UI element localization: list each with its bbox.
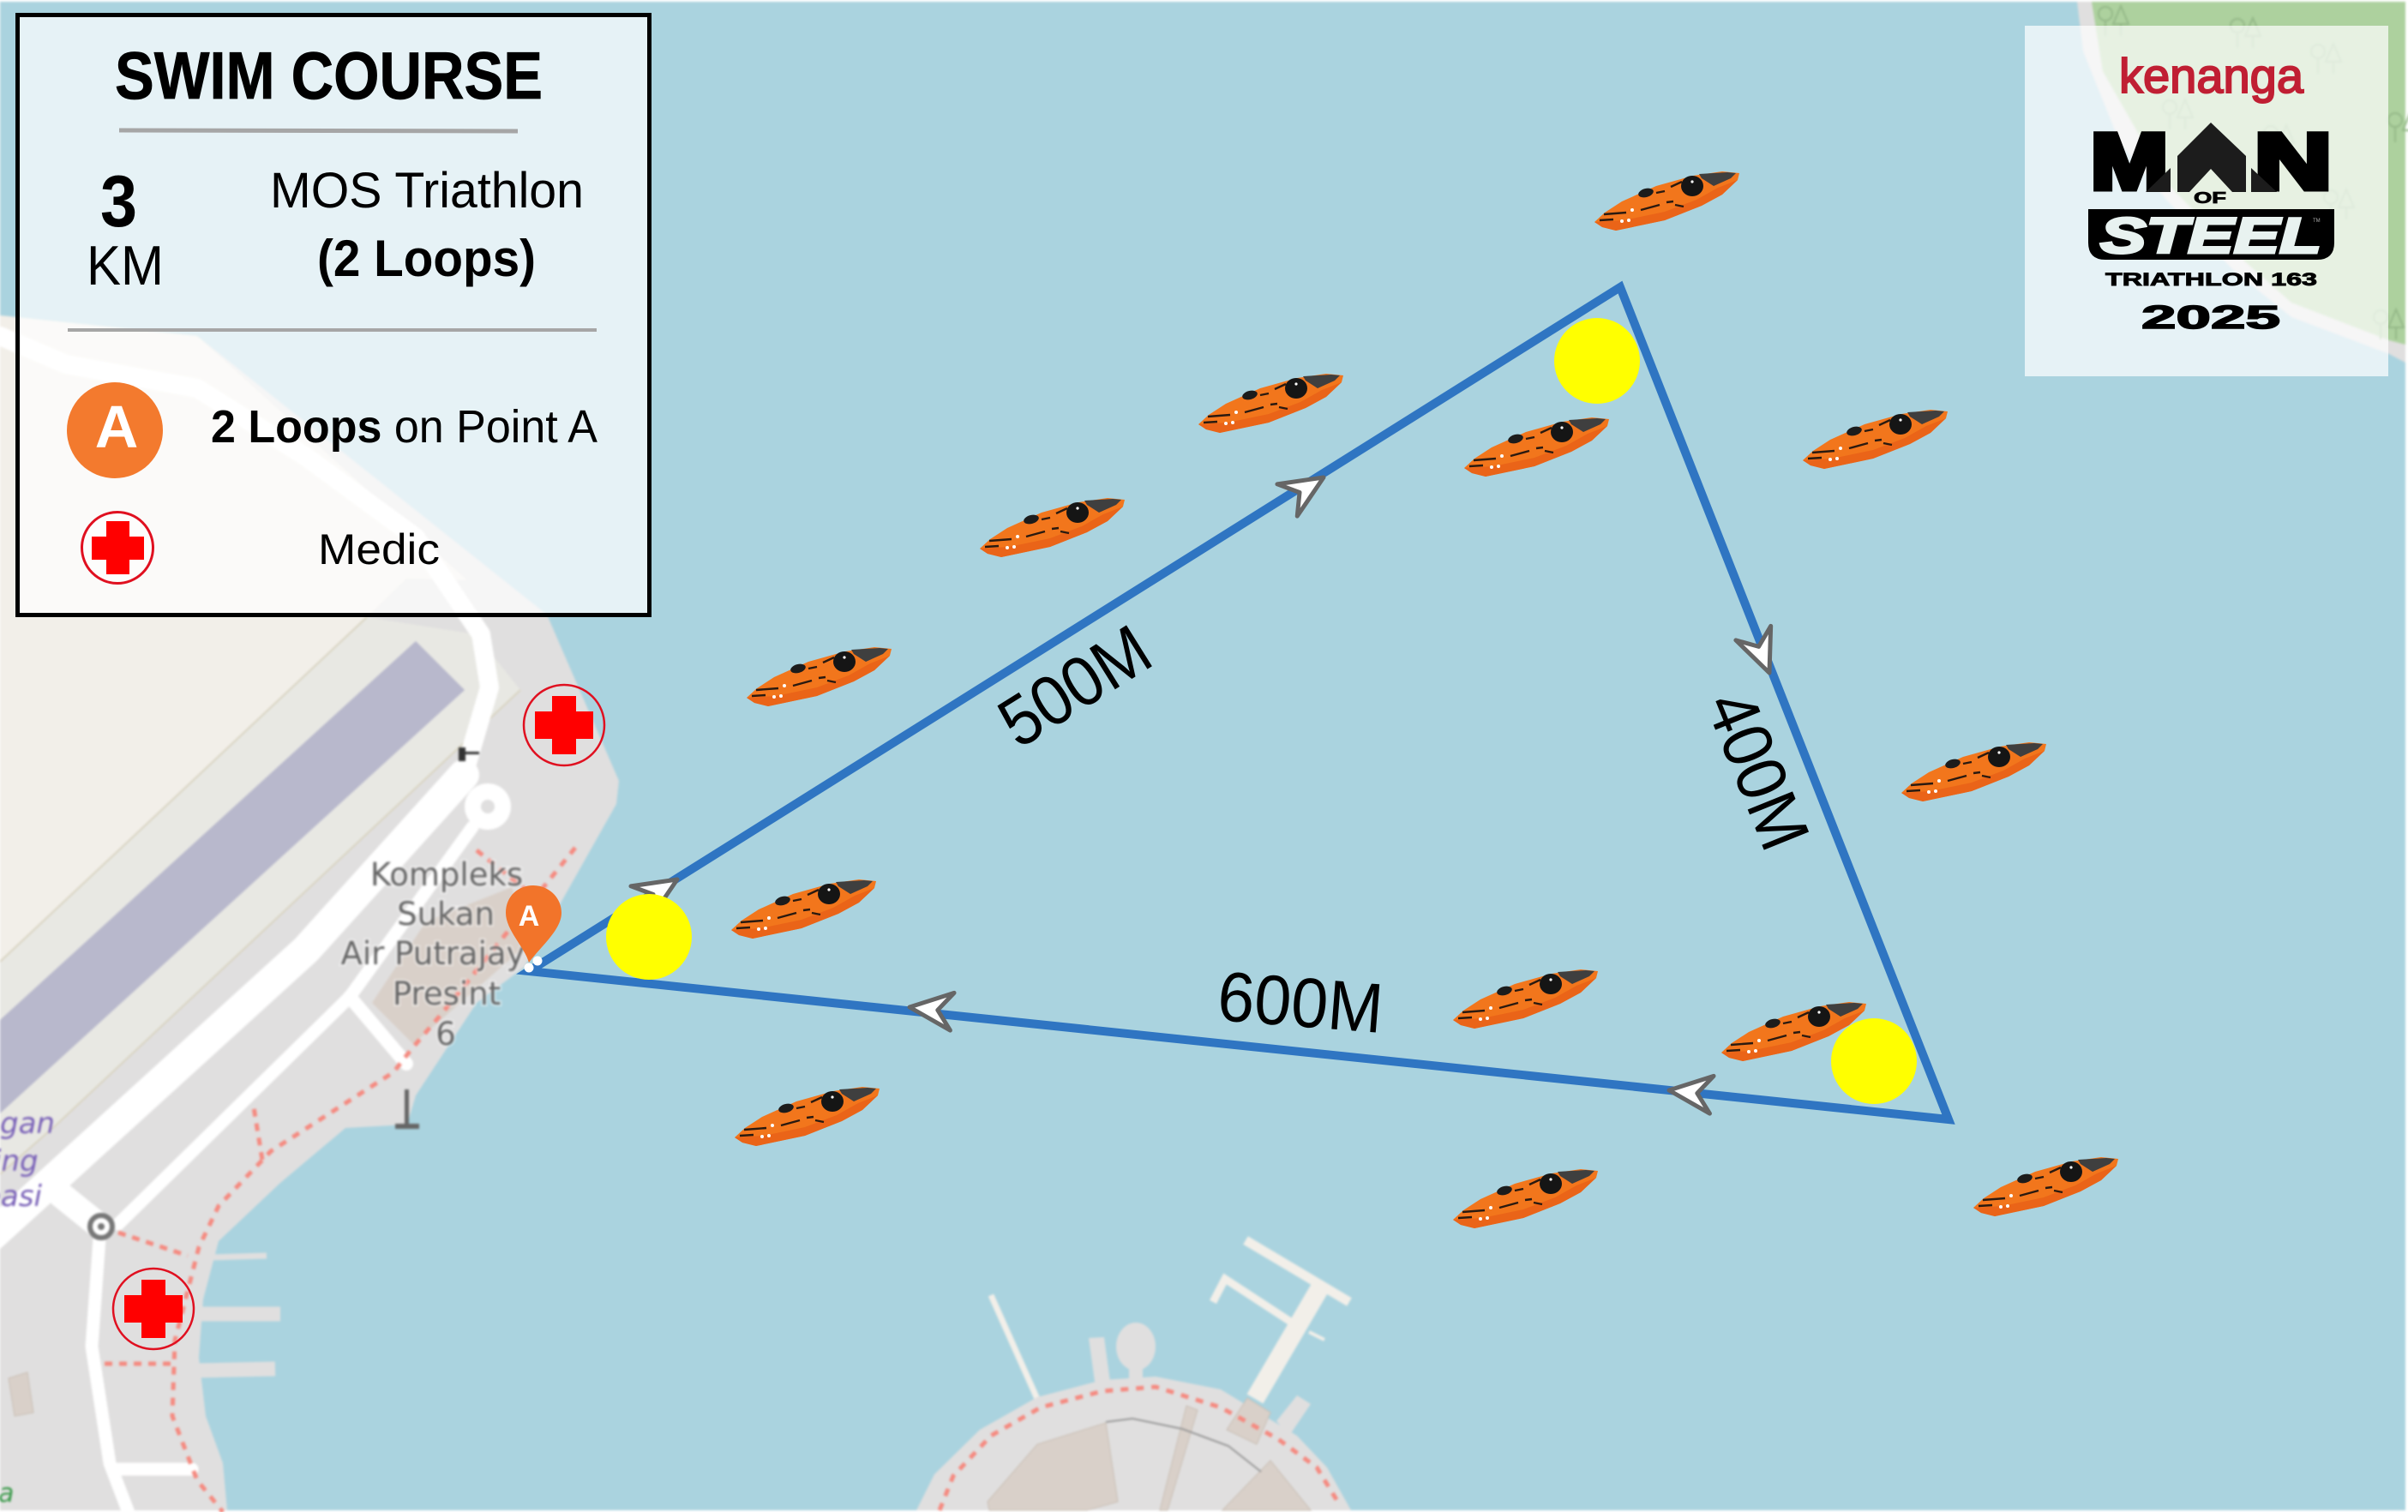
buoy: top corner (1554, 318, 1640, 404)
roundabout hole (481, 800, 495, 813)
race description (270, 163, 584, 287)
kayak (731, 879, 876, 939)
pedestrian paths (105, 848, 575, 1512)
distance label: 600M: 600M (1215, 957, 1386, 1048)
arrow: 400M leg (1736, 626, 1786, 680)
logo: MAN (2091, 118, 2332, 206)
kayak (1973, 1157, 2118, 1216)
kayak (980, 498, 1125, 557)
buoy: start (606, 894, 692, 980)
pier icon (395, 1089, 419, 1129)
icon: point A: A (95, 393, 138, 460)
map label: Kompleks Sukan Air Putrajaya Presint 6: Sukan (397, 896, 495, 933)
logo: 2025: 2025 (2141, 300, 2280, 336)
distance label: 400M: 400M (1690, 681, 1824, 861)
map label: Kompleks Sukan Air Putrajaya Presint 6: Air Putrajay (341, 935, 525, 972)
kayak (1901, 742, 2046, 801)
distance: 3 KM: 3 (100, 161, 137, 243)
logo: MAN: A (2195, 124, 2226, 172)
icon: medic legend (82, 513, 153, 583)
arrow: start of 500M leg (631, 863, 688, 918)
map label: Kompleks Sukan Air Putrajaya Presint 6: 6 (435, 1016, 456, 1053)
icon: mountain (2146, 123, 2277, 192)
island, bottom centre (916, 1240, 1351, 1510)
map label: purple place name (0, 1107, 55, 1214)
distance label: 500M: 500M (985, 610, 1165, 763)
logo: kenanga: kenanga (2119, 49, 2303, 104)
logo: STEEL badge: STEEL (2100, 208, 2321, 264)
logo: triathlon 163: TRIATHLON 163 (2105, 270, 2317, 290)
swim course triangle (529, 287, 1949, 1119)
kayak (1721, 1002, 1866, 1061)
panel: event logo (2025, 26, 2388, 376)
kayak (1594, 171, 1739, 231)
map label: purple place name: gan (0, 1107, 55, 1141)
icon: start pin A: A (519, 900, 539, 933)
legend text: medic: Medic (318, 525, 440, 573)
arrow: 600M leg near corner (1667, 1071, 1714, 1113)
kayak (1198, 374, 1343, 433)
icon: start pin A (506, 885, 561, 972)
roundabout marker (90, 1215, 112, 1238)
arrow: 500M leg (1277, 461, 1334, 516)
small tan hut (9, 1372, 33, 1416)
icon: medic, north (524, 685, 604, 765)
kayak (1464, 417, 1609, 477)
heading: SWIM COURSE (115, 38, 543, 113)
kayak (735, 1087, 880, 1146)
land: sports ground band (0, 617, 520, 1174)
logo: MAN: N (2255, 118, 2332, 206)
map label: Kompleks Sukan Air Putrajaya Presint 6: Kompleks (370, 856, 523, 893)
land: light area (0, 315, 467, 962)
piers, left shore (195, 1256, 280, 1371)
race description: (2 Loops) (317, 230, 536, 287)
kayak (1453, 969, 1598, 1029)
logo: STEEL badge: TM (2313, 219, 2321, 224)
arrow: 600M leg near start (908, 988, 954, 1030)
land: purple building (0, 641, 465, 1113)
distance: 3 KM (87, 161, 164, 297)
map label: Kompleks Sukan Air Putrajaya Presint 6 (341, 856, 525, 1053)
map label: Kompleks Sukan Air Putrajaya Presint 6: Presint (393, 975, 501, 1012)
land: shoreline (0, 315, 619, 1510)
land: brown building (372, 887, 529, 1044)
kayak (1803, 410, 1948, 469)
buoy: right corner (1831, 1018, 1917, 1104)
flag icon (459, 747, 479, 761)
logo: OF: OF (2194, 189, 2226, 207)
distance: 3 KM: KM (87, 234, 164, 297)
legend text: 2 loops on point A: 2 Loops on Point A (211, 401, 597, 453)
park area, top right (2077, 2, 2408, 363)
roads (0, 336, 511, 1512)
icon: point A (67, 382, 163, 478)
kayak (747, 647, 892, 706)
logo: STEEL badge (2088, 208, 2334, 264)
kayak (1453, 1169, 1598, 1228)
panel: swim course legend (17, 15, 650, 615)
logo: MAN: M (2091, 118, 2168, 206)
race description: MOS Triathlon (270, 163, 584, 219)
icon: medic, south (113, 1269, 194, 1349)
